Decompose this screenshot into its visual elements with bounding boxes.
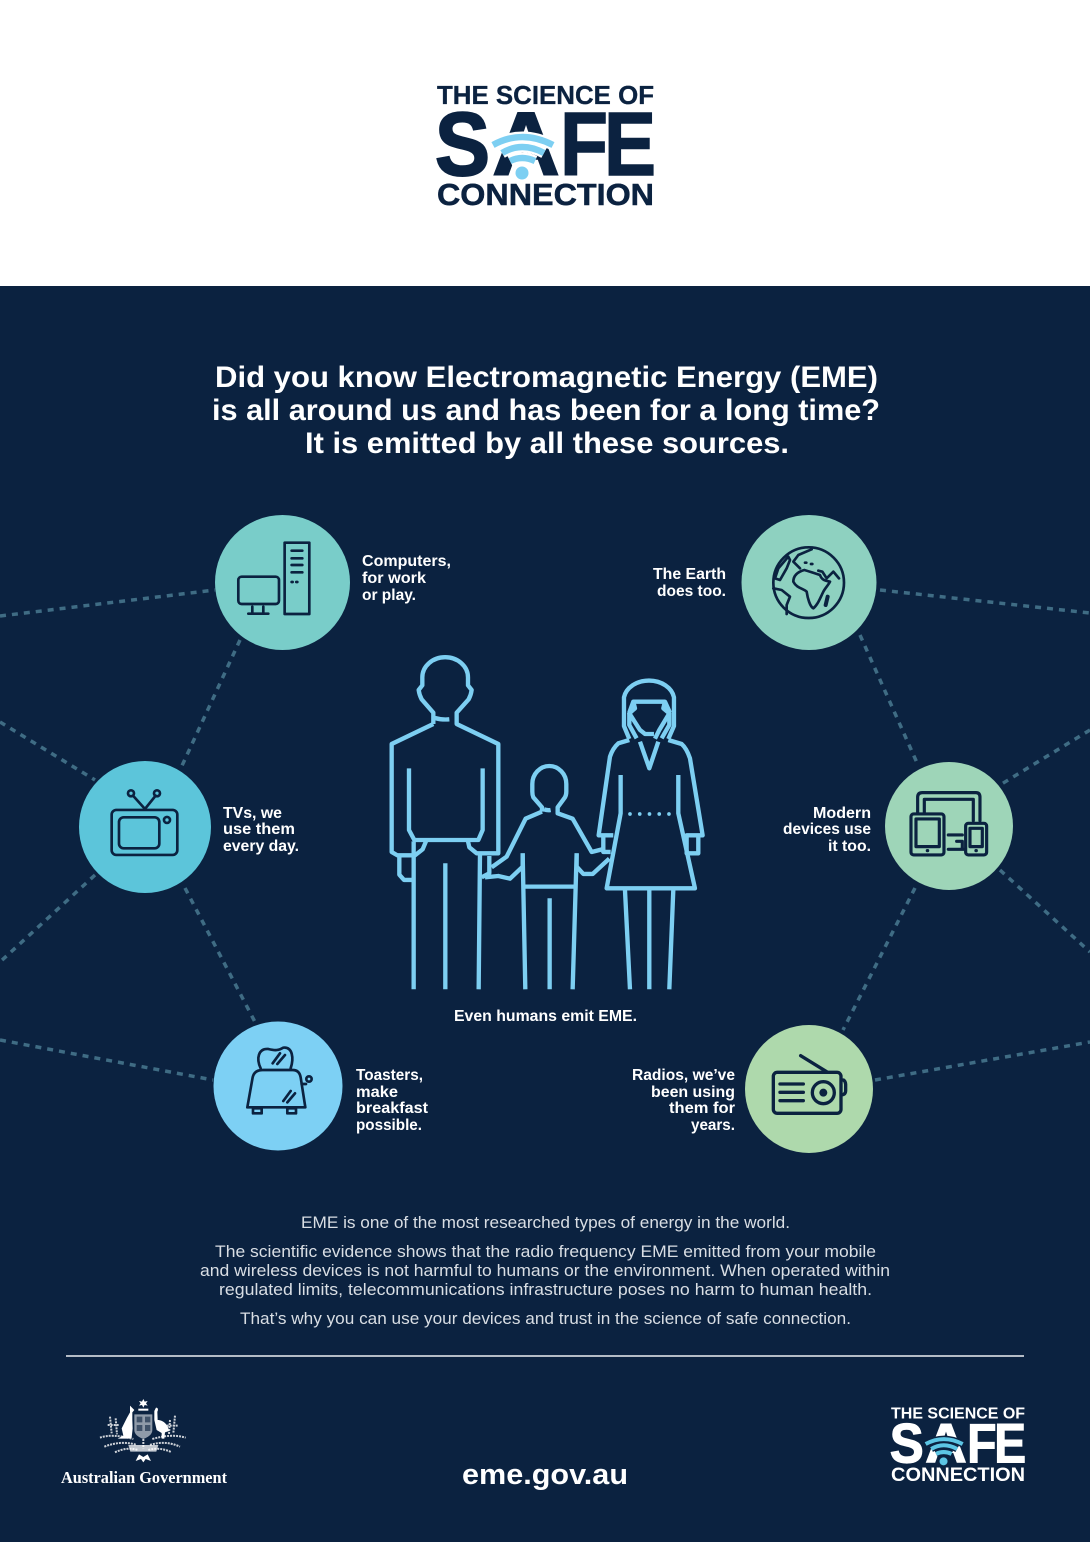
woman <box>599 681 703 989</box>
label: tv <box>223 805 299 855</box>
body copy <box>200 1214 890 1328</box>
logo: the science of safe connection: CONNECTION <box>437 177 654 212</box>
node: toaster <box>214 1022 342 1150</box>
heading <box>212 361 880 460</box>
heading: is all around us and has been for a long time? <box>212 394 880 427</box>
icon: toaster <box>247 1048 312 1113</box>
node: modern devices <box>885 762 1013 890</box>
label: computers: for work <box>362 570 426 587</box>
label: toaster: Toasters, <box>356 1067 423 1084</box>
label: earth <box>653 566 726 600</box>
label: earth: does too. <box>657 583 726 600</box>
node: radio <box>745 1025 873 1153</box>
label: toaster: make <box>356 1084 398 1101</box>
crest <box>100 1399 186 1462</box>
body copy: EME is one of the most researched types of energy in the world. <box>301 1214 790 1232</box>
label: radio <box>632 1067 735 1134</box>
icon: radio <box>773 1056 846 1113</box>
footer logo: CONNECTION <box>891 1465 1025 1486</box>
node: tv <box>79 761 211 893</box>
footer logo: A <box>925 1413 967 1475</box>
label: radio: them for <box>669 1100 735 1117</box>
body copy: and wireless devices is not harmful to humans or the environment. When operated within <box>200 1262 890 1280</box>
label: radio: been using <box>651 1084 735 1101</box>
label: modern devices <box>783 805 871 855</box>
label: toaster: possible. <box>356 1117 422 1134</box>
footer logo <box>890 1406 1026 1486</box>
logo: the science of safe connection: F <box>560 95 608 195</box>
icon: television <box>112 790 177 855</box>
body copy: regulated limits, telecommunications infrastructure poses no harm to human health. <box>219 1281 872 1299</box>
heading: It is emitted by all these sources. <box>305 427 789 460</box>
label: toaster: breakfast <box>356 1100 428 1117</box>
child <box>485 766 609 989</box>
australian government logo <box>61 1399 227 1487</box>
label: tv: every day. <box>223 838 299 855</box>
label: earth: The Earth <box>653 566 726 583</box>
label: radio: years. <box>691 1117 735 1134</box>
icon: computer <box>238 543 309 614</box>
label: modern devices: Modern <box>813 805 871 822</box>
website url: eme.gov.au <box>462 1459 628 1491</box>
body copy: The scientific evidence shows that the radio frequency EME emitted from your mobile <box>215 1243 876 1261</box>
label: tv: TVs, we <box>223 805 282 822</box>
logo: the science of safe connection: E <box>604 95 656 195</box>
logo: the science of safe connection: THE SCIENCE OF <box>437 82 654 110</box>
label: computers: Computers, <box>362 553 451 570</box>
dashed network connectors <box>0 590 1090 1080</box>
logo: the science of safe connection: S <box>435 95 490 195</box>
icon: devices <box>911 793 987 855</box>
caption: humans: Even humans emit EME. <box>454 1008 637 1025</box>
label: radio: Radios, we’ve <box>632 1067 735 1084</box>
footer logo: E <box>994 1413 1026 1475</box>
footer logo: S <box>890 1413 924 1475</box>
man <box>392 657 498 989</box>
label: computers <box>362 553 451 604</box>
footer logo: THE SCIENCE OF <box>891 1406 1025 1423</box>
node: computers <box>215 515 350 650</box>
label: tv: use them <box>223 821 295 838</box>
australian government logo: Australian Government <box>61 1468 227 1487</box>
node: earth <box>742 515 876 650</box>
footer logo: F <box>967 1413 997 1475</box>
header band <box>0 0 1090 286</box>
label: computers: or play. <box>362 587 416 604</box>
label: modern devices: it too. <box>828 838 871 855</box>
label: toaster <box>356 1067 428 1134</box>
logo: the science of safe connection <box>435 82 656 212</box>
icon: globe <box>773 547 844 618</box>
label: modern devices: devices use <box>783 821 871 838</box>
logo: the science of safe connection: A <box>492 95 560 195</box>
heading: Did you know Electromagnetic Energy (EME) <box>215 361 878 394</box>
body copy: That’s why you can use your devices and trust in the science of safe connection. <box>240 1310 851 1328</box>
illustration: family outline <box>392 657 703 989</box>
